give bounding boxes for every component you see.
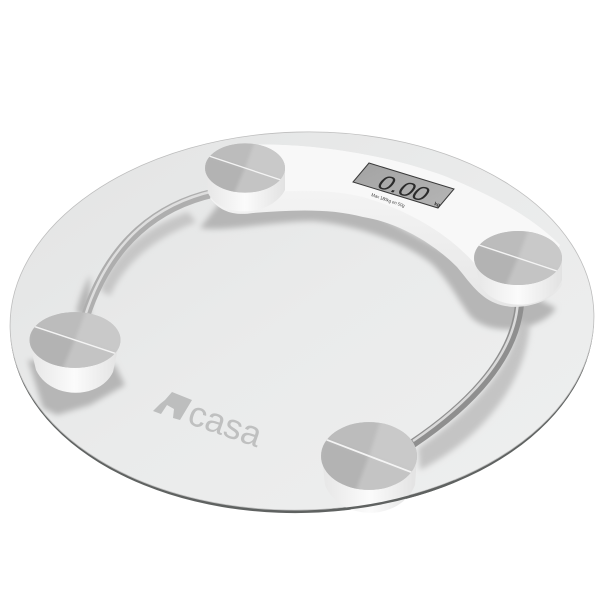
white display arc [210, 144, 562, 307]
foot: right [472, 229, 564, 305]
brand name: casa [183, 394, 268, 455]
shadow: left foot [28, 360, 125, 415]
foot: left [28, 310, 122, 393]
shadow: right tube [418, 320, 530, 470]
LCD unit: kg [433, 201, 441, 209]
shadows on the glass [28, 190, 556, 470]
dark glass edge [5, 125, 599, 521]
metal tube: left [85, 191, 214, 318]
LCD display [353, 163, 454, 209]
capacity label: Max 180kg en 50g [371, 192, 406, 208]
brand logo icon [153, 392, 192, 420]
LCD reading: 0.00 [372, 171, 436, 205]
shadow: display arc [200, 190, 556, 329]
foot: bottom [321, 422, 454, 512]
metal tube: right [412, 294, 520, 444]
foot: top left [203, 142, 287, 211]
shadow: left tube [100, 212, 196, 296]
glass plate [5, 124, 599, 521]
product photo: round glass bathroom scale [10, 132, 594, 514]
